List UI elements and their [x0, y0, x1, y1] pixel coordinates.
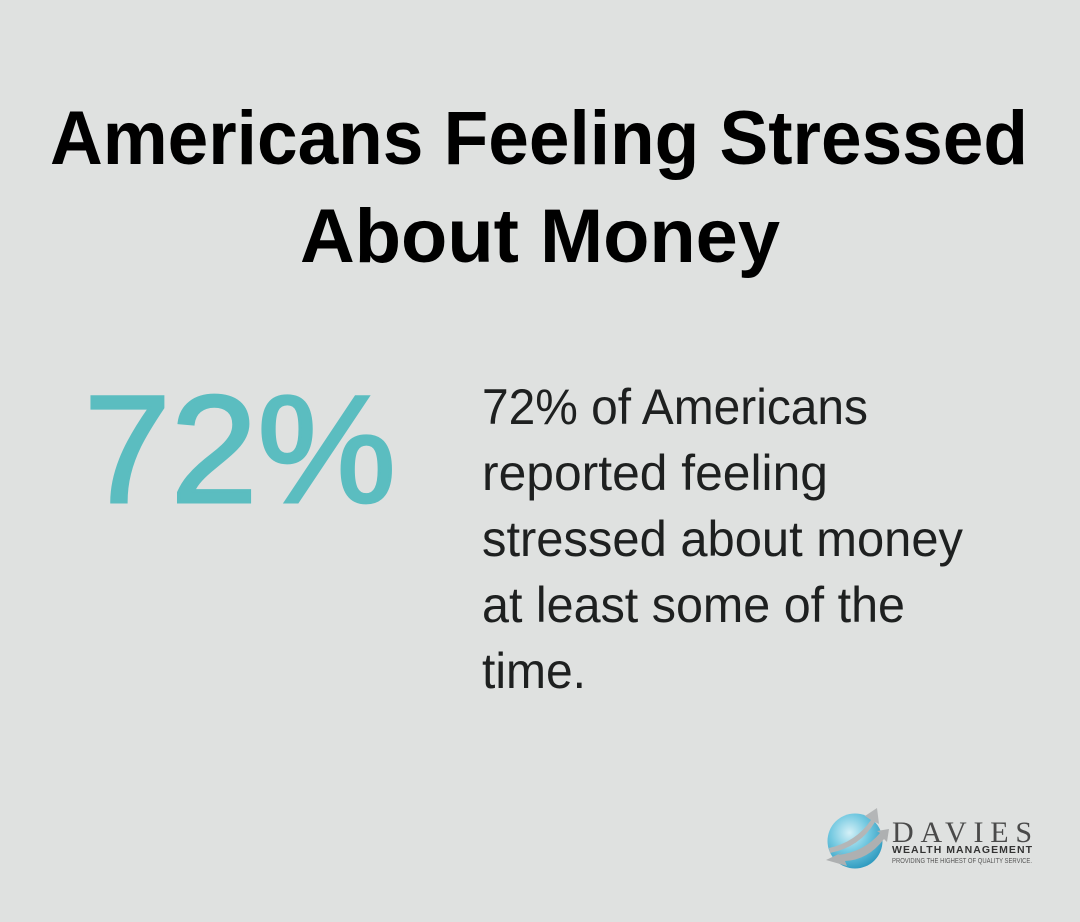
description text: 72% of Americans — [482, 379, 868, 435]
description text: reported feeling — [482, 445, 828, 501]
title: Americans Feeling Stressed — [50, 96, 1028, 181]
title — [50, 96, 1028, 279]
icon: globe with arrows — [826, 808, 889, 868]
logo: Davies Wealth Management — [826, 808, 1033, 868]
title: About Money — [300, 194, 780, 279]
description text: time. — [482, 643, 586, 699]
big statistic: 72%: 72% — [84, 364, 396, 535]
logo subtitle: WEALTH MANAGEMENT — [892, 844, 1033, 856]
description text: stressed about money — [482, 511, 963, 567]
logo wordmark: DAVIES — [892, 816, 1032, 849]
description text — [482, 379, 963, 699]
description text: at least some of the — [482, 577, 905, 633]
logo tagline: PROVIDING THE HIGHEST OF QUALITY SERVICE. — [892, 856, 1032, 865]
